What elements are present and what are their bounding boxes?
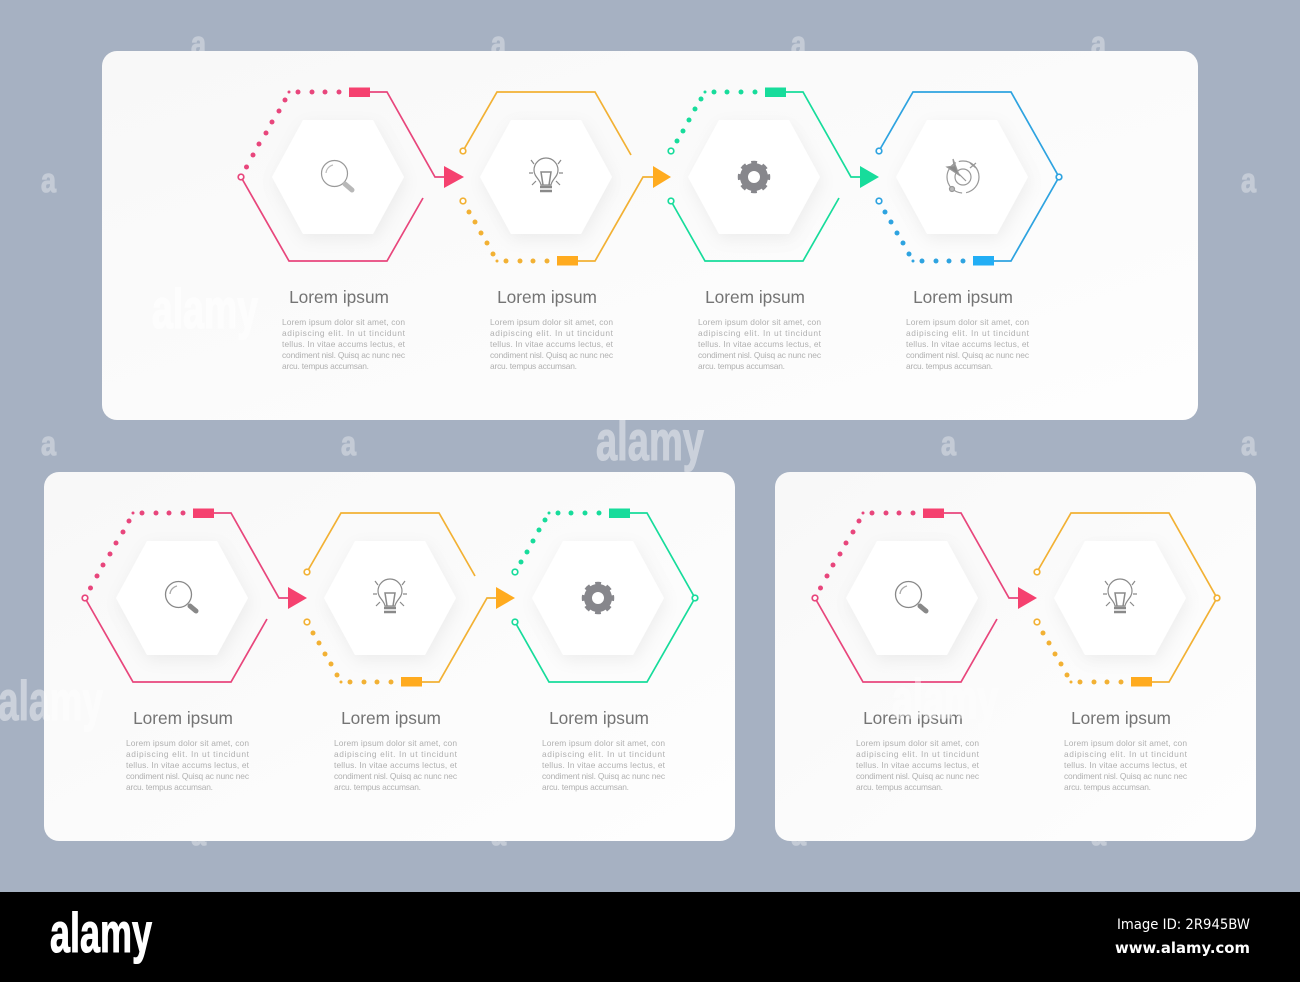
step description: arcu. tempus accumsan. xyxy=(334,782,421,792)
step 3 of three: settings xyxy=(512,508,698,792)
step description: condiment nisl. Quisq ac nunc nec xyxy=(334,771,457,781)
step description xyxy=(282,317,406,371)
step 2 of four: idea xyxy=(460,92,671,371)
large watermarks xyxy=(0,277,998,732)
hexagon outline: blue xyxy=(876,92,1062,266)
small watermark marks on background: a xyxy=(1241,162,1257,200)
step description: arcu. tempus accumsan. xyxy=(282,361,369,371)
step 2 of three: idea xyxy=(304,513,515,792)
small watermark marks on background: a xyxy=(491,815,507,853)
step title: Lorem ipsum xyxy=(913,287,1013,307)
large watermarks: alamy xyxy=(152,277,258,340)
arrow xyxy=(288,587,307,609)
small watermark marks on background: a xyxy=(41,425,57,463)
step title: Lorem ipsum xyxy=(133,708,233,728)
small watermark marks on background: a xyxy=(791,815,807,853)
step description xyxy=(490,317,614,371)
step description: adipiscing elit. In ut tincidunt xyxy=(906,328,1030,338)
inner hexagon xyxy=(532,541,664,655)
step description xyxy=(1064,738,1188,792)
step description: arcu. tempus accumsan. xyxy=(698,361,785,371)
inner hexagon xyxy=(272,120,404,234)
icon: magnifier xyxy=(322,160,352,190)
step description: tellus. In vitae accums lectus, et xyxy=(906,339,1030,349)
step description: adipiscing elit. In ut tincidunt xyxy=(334,749,458,759)
step 1 of four: search xyxy=(238,88,464,371)
arrow xyxy=(653,166,671,188)
small watermark marks on background xyxy=(41,25,1257,853)
small watermark marks on background: a xyxy=(941,425,957,463)
icon: magnifier xyxy=(166,582,196,611)
step description: tellus. In vitae accums lectus, et xyxy=(542,760,666,770)
step description: tellus. In vitae accums lectus, et xyxy=(126,760,250,770)
hexagon outline: green xyxy=(512,508,698,682)
small watermark marks on background: a xyxy=(791,25,807,63)
step 1 of two: search xyxy=(812,508,1037,792)
step description: arcu. tempus accumsan. xyxy=(906,361,993,371)
step title: Lorem ipsum xyxy=(549,708,649,728)
step title: Lorem ipsum xyxy=(497,287,597,307)
icon: light bulb xyxy=(1103,579,1137,612)
step description: adipiscing elit. In ut tincidunt xyxy=(856,749,980,759)
step description: Lorem ipsum dolor sit amet, con xyxy=(334,738,457,748)
step 2 of two: idea xyxy=(1034,513,1220,792)
inner hexagon xyxy=(116,541,248,655)
small watermark marks on background: a xyxy=(491,25,507,63)
small watermark marks on background: a xyxy=(341,425,357,463)
step 3 of four: settings xyxy=(668,88,879,371)
step description: Lorem ipsum dolor sit amet, con xyxy=(490,317,613,327)
step description xyxy=(542,738,666,792)
hexagon outline: pink xyxy=(812,508,1020,682)
small watermark marks on background: a xyxy=(1091,815,1107,853)
step 1 of three: search xyxy=(82,508,307,792)
icon: light bulb xyxy=(373,579,407,612)
step description xyxy=(856,738,980,792)
arrow xyxy=(860,166,879,188)
step description: arcu. tempus accumsan. xyxy=(126,782,213,792)
step description: tellus. In vitae accums lectus, et xyxy=(334,760,458,770)
step 4 of four: target xyxy=(876,92,1062,371)
step description: condiment nisl. Quisq ac nunc nec xyxy=(1064,771,1187,781)
panel: three step card xyxy=(44,472,735,841)
step description: Lorem ipsum dolor sit amet, con xyxy=(698,317,821,327)
step description xyxy=(334,738,458,792)
step description: condiment nisl. Quisq ac nunc nec xyxy=(906,350,1029,360)
website url: www.alamy.com xyxy=(1115,939,1250,957)
step description: arcu. tempus accumsan. xyxy=(1064,782,1151,792)
step description: arcu. tempus accumsan. xyxy=(856,782,943,792)
step description: tellus. In vitae accums lectus, et xyxy=(490,339,614,349)
step description: condiment nisl. Quisq ac nunc nec xyxy=(542,771,665,781)
step description: tellus. In vitae accums lectus, et xyxy=(856,760,980,770)
hexagon outline: yellow xyxy=(304,513,498,686)
footer logo: alamy xyxy=(50,901,152,964)
icon: light bulb xyxy=(529,158,563,191)
large watermarks: alamy xyxy=(892,667,998,730)
small watermark marks on background: a xyxy=(191,815,207,853)
icon: target with dart xyxy=(947,159,979,193)
step description: Lorem ipsum dolor sit amet, con xyxy=(906,317,1029,327)
step description: adipiscing elit. In ut tincidunt xyxy=(490,328,614,338)
hexagon outline: pink xyxy=(238,88,446,261)
footer band xyxy=(0,892,1300,982)
step description: adipiscing elit. In ut tincidunt xyxy=(1064,749,1188,759)
large watermarks: alamy xyxy=(596,409,704,472)
step description: adipiscing elit. In ut tincidunt xyxy=(698,328,822,338)
step description: condiment nisl. Quisq ac nunc nec xyxy=(698,350,821,360)
inner hexagon xyxy=(324,541,456,655)
step description: adipiscing elit. In ut tincidunt xyxy=(282,328,406,338)
step description: tellus. In vitae accums lectus, et xyxy=(282,339,406,349)
step title: Lorem ipsum xyxy=(341,708,441,728)
small watermark marks on background: a xyxy=(1091,25,1107,63)
step description: arcu. tempus accumsan. xyxy=(542,782,629,792)
step title: Lorem ipsum xyxy=(289,287,389,307)
step description: Lorem ipsum dolor sit amet, con xyxy=(282,317,405,327)
step description xyxy=(126,738,250,792)
inner hexagon xyxy=(896,120,1028,234)
small watermark marks on background: a xyxy=(1241,425,1257,463)
step description: condiment nisl. Quisq ac nunc nec xyxy=(490,350,613,360)
small watermark marks on background: a xyxy=(191,25,207,63)
hexagon outline: green xyxy=(668,88,862,261)
step description: arcu. tempus accumsan. xyxy=(490,361,577,371)
step description: adipiscing elit. In ut tincidunt xyxy=(542,749,666,759)
step description: Lorem ipsum dolor sit amet, con xyxy=(126,738,249,748)
arrow xyxy=(496,587,515,609)
panel: two step card xyxy=(775,472,1256,841)
step description xyxy=(906,317,1030,371)
arrow xyxy=(1018,587,1037,609)
step description: adipiscing elit. In ut tincidunt xyxy=(126,749,250,759)
large watermarks: alamy xyxy=(0,669,103,732)
icon: magnifier xyxy=(896,582,926,611)
step description: Lorem ipsum dolor sit amet, con xyxy=(856,738,979,748)
step title: Lorem ipsum xyxy=(1071,708,1171,728)
step description: condiment nisl. Quisq ac nunc nec xyxy=(282,350,405,360)
step title: Lorem ipsum xyxy=(863,708,963,728)
step description: condiment nisl. Quisq ac nunc nec xyxy=(856,771,979,781)
step description: Lorem ipsum dolor sit amet, con xyxy=(542,738,665,748)
inner hexagon xyxy=(688,120,820,234)
hexagon outline: yellow xyxy=(1034,513,1220,686)
inner hexagon xyxy=(1054,541,1186,655)
inner hexagon xyxy=(846,541,978,655)
step description: tellus. In vitae accums lectus, et xyxy=(698,339,822,349)
hexagon outline: yellow xyxy=(460,92,654,266)
step description xyxy=(698,317,822,371)
icon: gear xyxy=(740,163,768,191)
step description: Lorem ipsum dolor sit amet, con xyxy=(1064,738,1187,748)
step title: Lorem ipsum xyxy=(705,287,805,307)
step description: tellus. In vitae accums lectus, et xyxy=(1064,760,1188,770)
icon: gear xyxy=(584,584,612,612)
image id: Image ID: 2R945BW xyxy=(1117,917,1250,933)
small watermark marks on background: a xyxy=(41,162,57,200)
step description: condiment nisl. Quisq ac nunc nec xyxy=(126,771,249,781)
inner hexagon xyxy=(480,120,612,234)
arrow xyxy=(444,166,464,188)
panel: four step card xyxy=(102,51,1198,420)
hexagon outline: pink xyxy=(82,508,290,682)
